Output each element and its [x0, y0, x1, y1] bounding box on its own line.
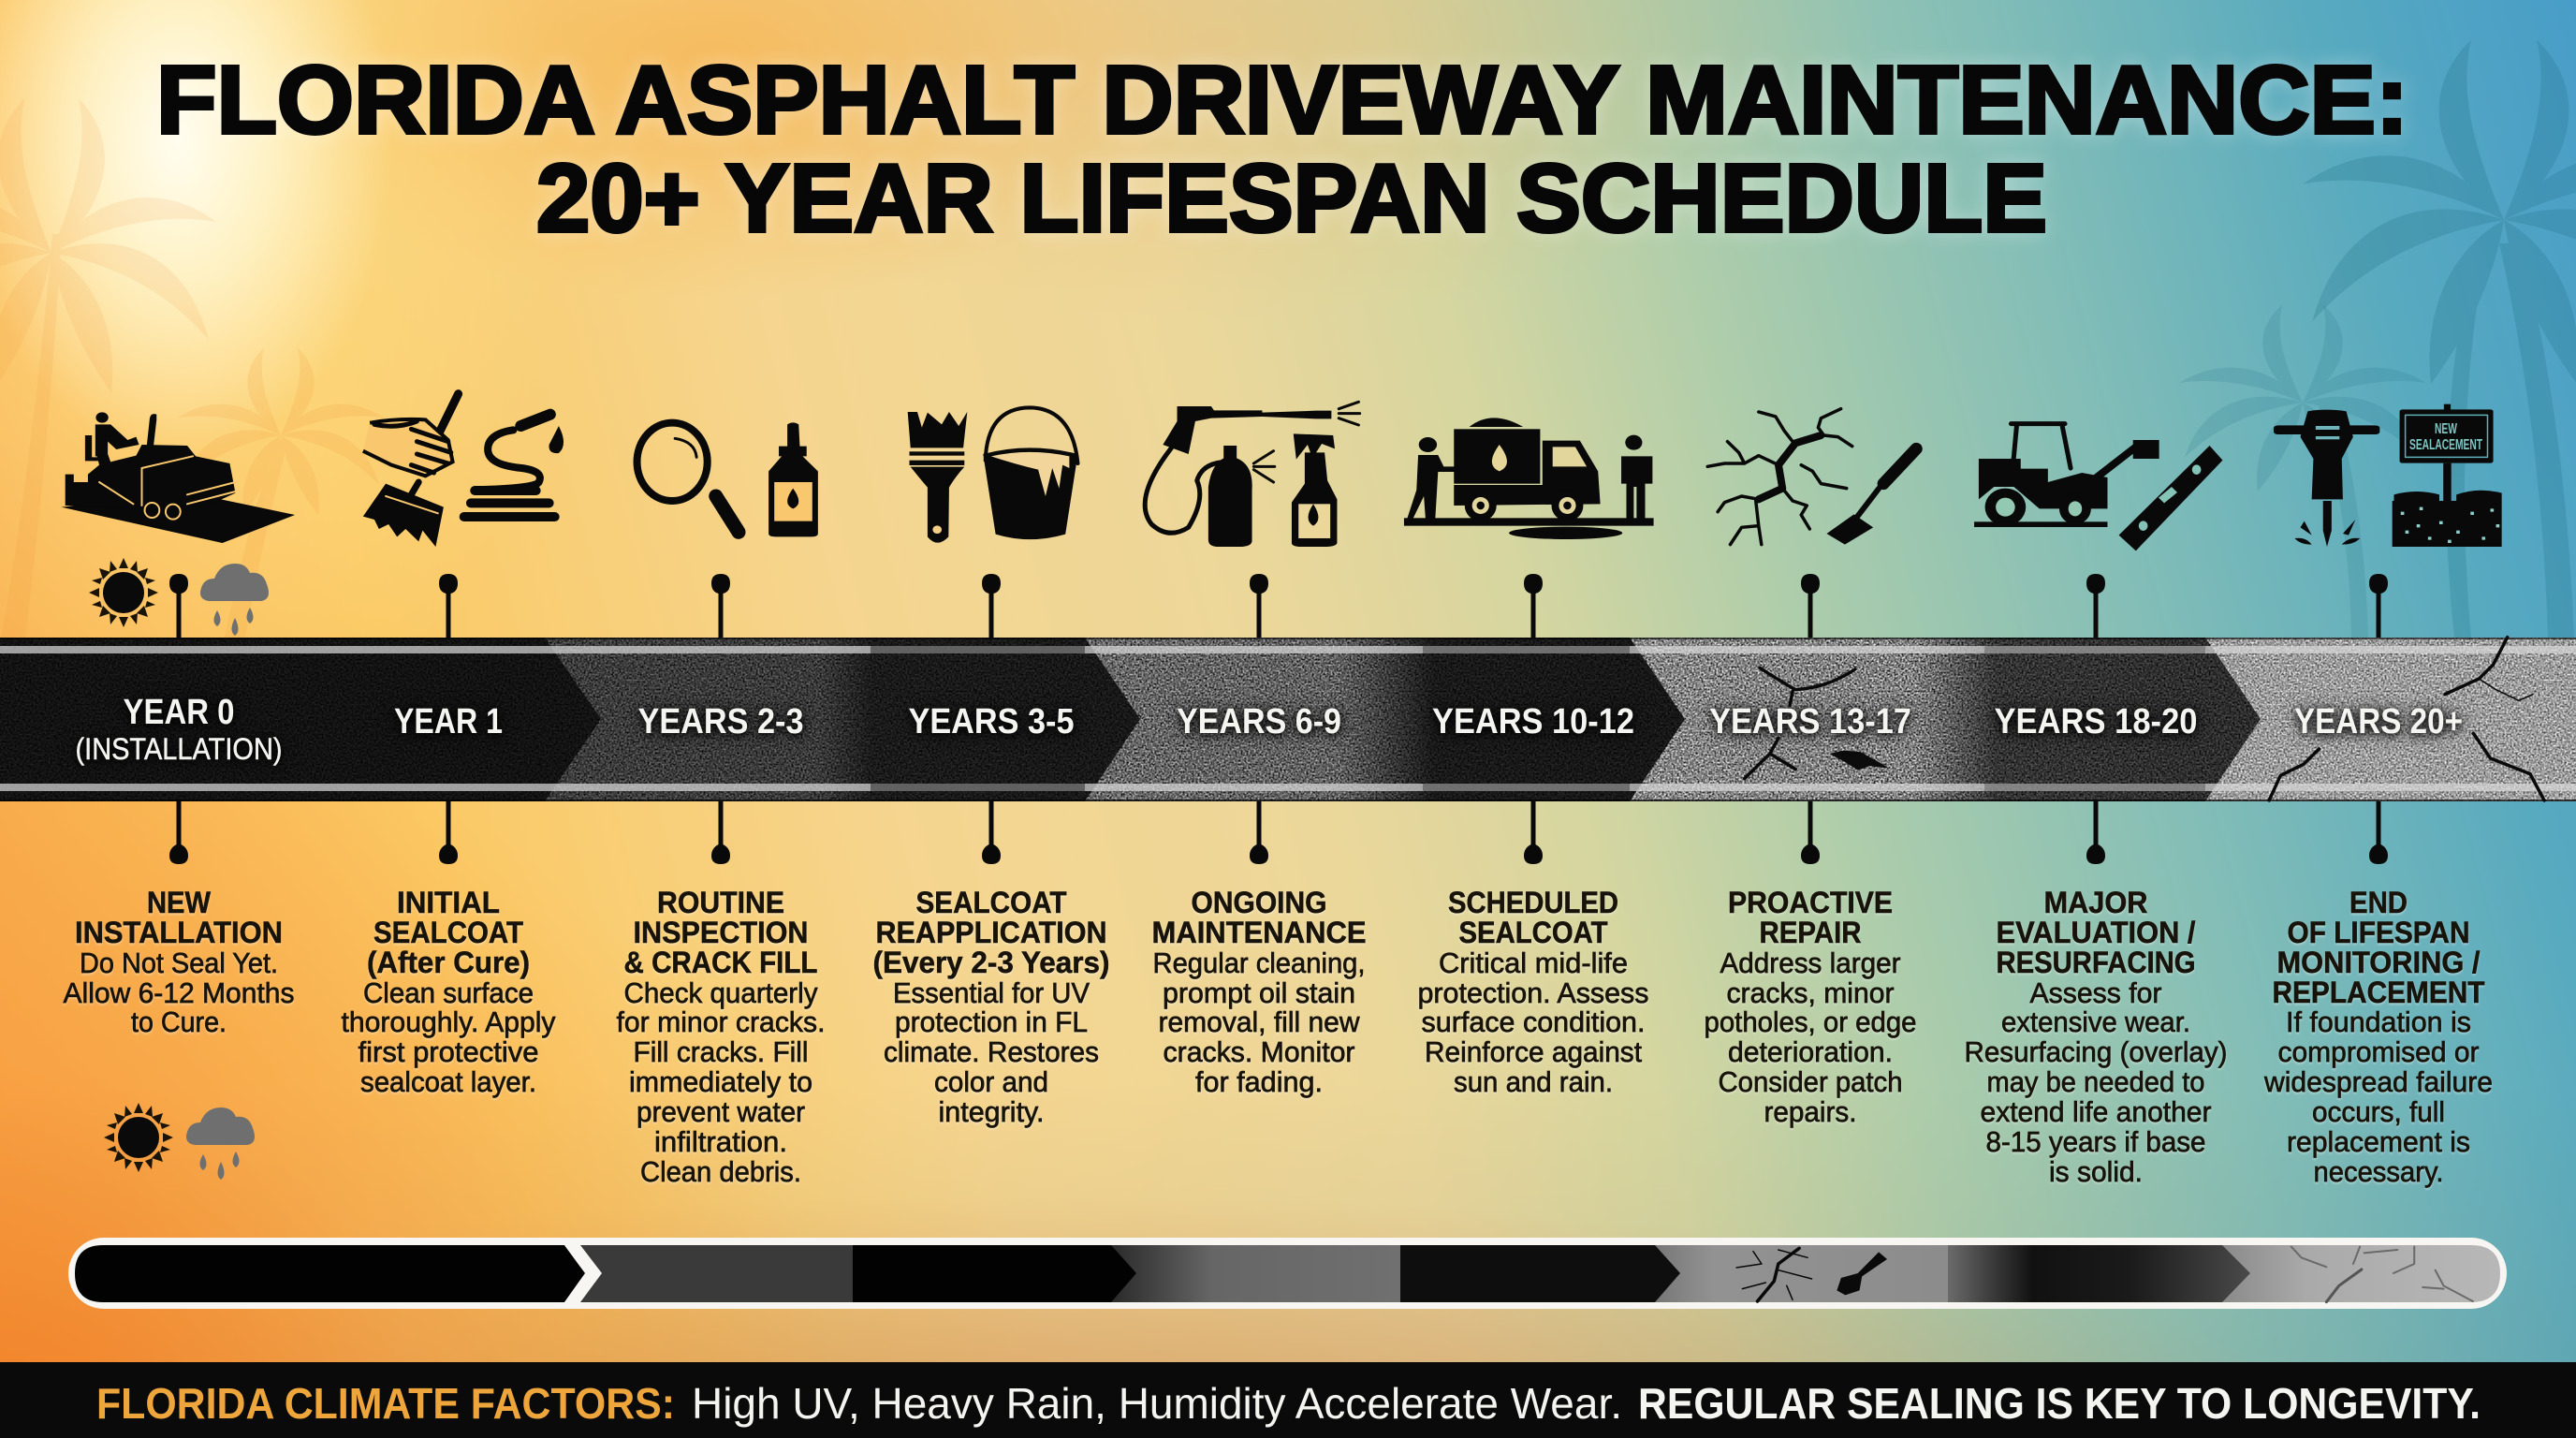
icon: sun and rain by year 0 pin	[89, 558, 269, 636]
text: scheduled sealcoat	[1417, 886, 1649, 1098]
text: scheduled sealcoat: surface condition.	[1421, 1005, 1646, 1038]
text: new installation: to Cure.	[131, 1005, 227, 1038]
year labels: YEARS 6-9	[1177, 702, 1341, 741]
icon: replacement sign and ground: NEW	[2435, 421, 2458, 437]
text: initial sealcoat: Clean surface	[363, 976, 534, 1009]
bar segments	[75, 1245, 2500, 1302]
text: ongoing maintenance	[1151, 886, 1367, 1098]
text: proactive repair: PROACTIVE	[1728, 886, 1893, 919]
text: routine inspection: Check quarterly	[623, 976, 818, 1009]
text: major evaluation: is solid.	[2049, 1155, 2143, 1188]
year labels: YEARS 13-17	[1709, 702, 1911, 741]
column text blocks	[64, 886, 2493, 1188]
text: sealcoat reapplication	[872, 886, 1110, 1128]
icon: asphalt paver	[61, 412, 295, 543]
text: major evaluation: extend life another	[1981, 1095, 2211, 1128]
bar crack and shovel icon	[1736, 1248, 1887, 1301]
lane stripes	[0, 646, 2576, 791]
text: major evaluation: EVALUATION /	[1996, 916, 2196, 949]
footer banner: REGULAR SEALING IS KEY TO LONGEVITY.	[1638, 1379, 2481, 1428]
text: routine inspection: Fill cracks. Fill	[633, 1035, 809, 1068]
text: routine inspection: INSPECTION	[633, 916, 809, 949]
text: routine inspection: prevent water	[637, 1095, 805, 1128]
road cracks and pothole	[1745, 638, 2544, 800]
text: end of lifespan: REPLACEMENT	[2273, 976, 2485, 1009]
year labels: (INSTALLATION)	[75, 732, 283, 766]
text: sealcoat reapplication: integrity.	[938, 1095, 1045, 1128]
text: end of lifespan: widespread failure	[2263, 1065, 2493, 1098]
bottom stems and pins	[169, 801, 2388, 864]
footer banner	[0, 1362, 2576, 1438]
icon: paint brush and sealer bucket	[908, 407, 1077, 543]
text: initial sealcoat	[341, 886, 556, 1098]
text: sealcoat reapplication: (Every 2-3 Years)	[872, 946, 1110, 979]
icon: pressure washer and cleaning sprays	[1145, 402, 1360, 547]
text: initial sealcoat: INITIAL	[397, 886, 500, 919]
icon: magnifier and crack filler bottle	[637, 422, 818, 536]
year labels: YEARS 18-20	[1994, 702, 2198, 741]
text: end of lifespan: If foundation is	[2286, 1005, 2471, 1038]
text: major evaluation	[1964, 886, 2228, 1188]
text: major evaluation: extensive wear.	[2001, 1005, 2190, 1038]
text: sealcoat reapplication: climate. Restores	[884, 1035, 1099, 1068]
top stems and pins	[169, 574, 2388, 638]
text: routine inspection: infiltration.	[654, 1125, 787, 1158]
icon: hand with broom and hose	[363, 394, 564, 547]
text: proactive repair: deterioration.	[1728, 1035, 1893, 1068]
title: FLORIDA ASPHALT DRIVEWAY MAINTENANCE:	[156, 46, 2408, 154]
progress bar	[68, 1238, 2507, 1309]
title	[156, 46, 2408, 252]
text: sealcoat reapplication: protection in FL	[895, 1005, 1088, 1038]
text: sealcoat reapplication: REAPPLICATION	[876, 916, 1106, 949]
text: routine inspection: for minor cracks.	[616, 1005, 826, 1038]
text: proactive repair: potholes, or edge	[1704, 1005, 1917, 1038]
text: scheduled sealcoat: Reinforce against	[1425, 1035, 1642, 1068]
year labels: YEARS 20+	[2294, 702, 2463, 741]
text: proactive repair: REPAIR	[1760, 916, 1861, 949]
icon: jackhammer	[2274, 410, 2379, 547]
text: proactive repair: repairs.	[1764, 1095, 1857, 1128]
text: proactive repair: Address larger	[1720, 946, 1900, 979]
text: new installation: Do Not Seal Yet.	[80, 946, 278, 979]
segment: years 2-5 chevron	[545, 638, 1140, 801]
text: ongoing maintenance: removal, fill new	[1159, 1005, 1360, 1038]
text: end of lifespan: necessary.	[2314, 1155, 2443, 1188]
text: scheduled sealcoat: SCHEDULED	[1448, 886, 1618, 919]
icon: pavement cracks and shovel	[1707, 409, 1916, 545]
segment: years 6-12 chevron	[1085, 638, 1685, 801]
text: initial sealcoat: thoroughly. Apply	[341, 1005, 556, 1038]
text: proactive repair: cracks, minor	[1726, 976, 1895, 1009]
year labels: YEARS 3-5	[908, 702, 1075, 741]
text: routine inspection: & CRACK FILL	[623, 946, 818, 979]
text: scheduled sealcoat: protection. Assess	[1417, 976, 1649, 1009]
text: routine inspection	[616, 886, 826, 1188]
icon: replacement sign and ground	[2393, 404, 2502, 547]
icon: sun and rain under year 0	[104, 1103, 255, 1180]
footer banner: High UV, Heavy Rain, Humidity Accelerate Wear.	[692, 1379, 1622, 1428]
text: new installation: Allow 6-12 Months	[64, 976, 294, 1009]
palm tree silhouettes	[0, 39, 2576, 646]
icon: sealcoat truck and workers	[1404, 418, 1654, 539]
text: major evaluation: RESURFACING	[1996, 946, 2196, 979]
text: initial sealcoat: (After Cure)	[367, 946, 530, 979]
text: initial sealcoat: SEALCOAT	[373, 916, 523, 949]
text: end of lifespan: MONITORING /	[2276, 946, 2481, 979]
text: major evaluation: Assess for	[2029, 976, 2162, 1009]
year labels: YEARS 10-12	[1432, 702, 1634, 741]
text: routine inspection: Clean debris.	[640, 1155, 801, 1188]
footer banner: FLORIDA CLIMATE FACTORS:	[96, 1379, 675, 1428]
text: routine inspection: immediately to	[629, 1065, 812, 1098]
year labels: YEARS 2-3	[638, 702, 803, 741]
text: major evaluation: 8-15 years if base	[1986, 1125, 2205, 1158]
text: end of lifespan	[2263, 886, 2493, 1188]
text: ongoing maintenance: for fading.	[1195, 1065, 1323, 1098]
text: end of lifespan: occurs, full	[2312, 1095, 2445, 1128]
text: new installation: NEW	[147, 886, 212, 919]
text: initial sealcoat: first protective	[358, 1035, 539, 1068]
text: new installation	[64, 886, 294, 1038]
text: ongoing maintenance: ONGOING	[1191, 886, 1327, 919]
year labels: YEAR 1	[394, 702, 503, 741]
text: major evaluation: MAJOR	[2044, 886, 2147, 919]
text: major evaluation: Resurfacing (overlay)	[1964, 1035, 2228, 1068]
text: ongoing maintenance: MAINTENANCE	[1151, 916, 1367, 949]
icon: compact loader and level	[1974, 424, 2222, 550]
text: sealcoat reapplication: color and	[934, 1065, 1048, 1098]
year labels: YEAR 0	[124, 693, 234, 732]
text: scheduled sealcoat: sun and rain.	[1454, 1065, 1613, 1098]
dimmed stripes on dark segments	[871, 646, 2205, 791]
text: end of lifespan: compromised or	[2278, 1035, 2479, 1068]
text: ongoing maintenance: cracks. Monitor	[1163, 1035, 1355, 1068]
icon: replacement sign and ground: SEALACEMENT	[2409, 437, 2482, 453]
segment: years 0-1 chevron	[0, 638, 601, 801]
text: end of lifespan: OF LIFESPAN	[2288, 916, 2469, 949]
text: ongoing maintenance: prompt oil stain	[1163, 976, 1355, 1009]
text: routine inspection: ROUTINE	[657, 886, 784, 919]
text: initial sealcoat: sealcoat layer.	[360, 1065, 536, 1098]
segment: years 18-20 chevron	[1630, 638, 2261, 801]
text: scheduled sealcoat: SEALCOAT	[1458, 916, 1608, 949]
text: end of lifespan: END	[2349, 886, 2408, 919]
text: proactive repair: Consider patch	[1719, 1065, 1902, 1098]
year labels	[75, 693, 2463, 766]
text: sealcoat reapplication: Essential for UV	[893, 976, 1090, 1009]
bar end cracks	[2291, 1247, 2473, 1302]
text: ongoing maintenance: Regular cleaning,	[1153, 946, 1365, 979]
text: new installation: INSTALLATION	[75, 916, 283, 949]
text: end of lifespan: replacement is	[2287, 1125, 2470, 1158]
road timeline band	[0, 638, 2576, 801]
text: major evaluation: may be needed to	[1986, 1065, 2205, 1098]
text: sealcoat reapplication: SEALCOAT	[915, 886, 1067, 919]
title: 20+ YEAR LIFESPAN SCHEDULE	[536, 144, 2047, 252]
text: scheduled sealcoat: Critical mid-life	[1439, 946, 1628, 979]
text: proactive repair	[1704, 886, 1917, 1128]
